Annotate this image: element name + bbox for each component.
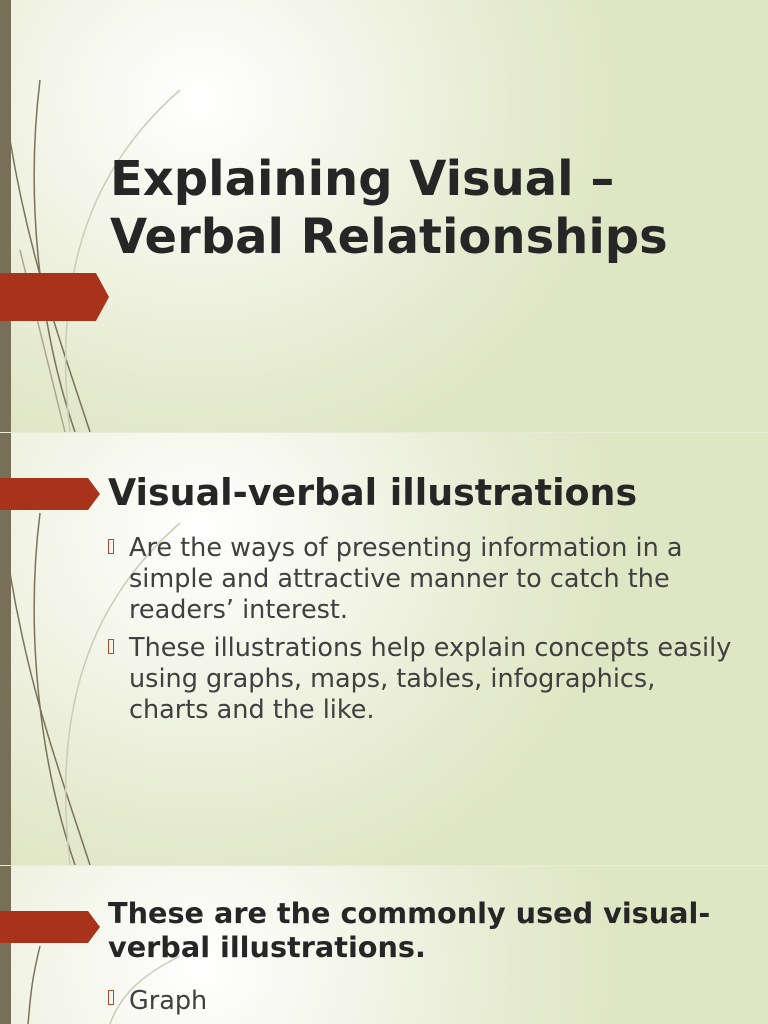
slide 3: commonly used illustrations <box>0 866 768 1024</box>
bullet list <box>108 533 731 725</box>
red arrow <box>0 478 100 510</box>
red arrow <box>0 911 100 943</box>
heading: These are the commonly used visual- <box>108 896 710 930</box>
bullet list: These illustrations help explain concepts easily using graphs, maps, tables, infographics, charts and the like. <box>129 633 731 725</box>
red arrow <box>0 273 109 321</box>
heading: verbal illustrations. <box>108 930 426 964</box>
slide 1: title <box>0 0 768 432</box>
title: Explaining Visual – <box>110 151 614 207</box>
slide 2: visual-verbal illustrations <box>0 433 768 865</box>
title: Verbal Relationships <box>110 209 668 265</box>
title <box>110 151 668 265</box>
bullet list: Are the ways of presenting information in a simple and attractive manner to catch the readers’ interest. <box>129 533 682 625</box>
bullet: graph: Graph <box>129 986 207 1016</box>
heading: Visual-verbal illustrations <box>108 471 637 514</box>
heading <box>108 896 710 964</box>
